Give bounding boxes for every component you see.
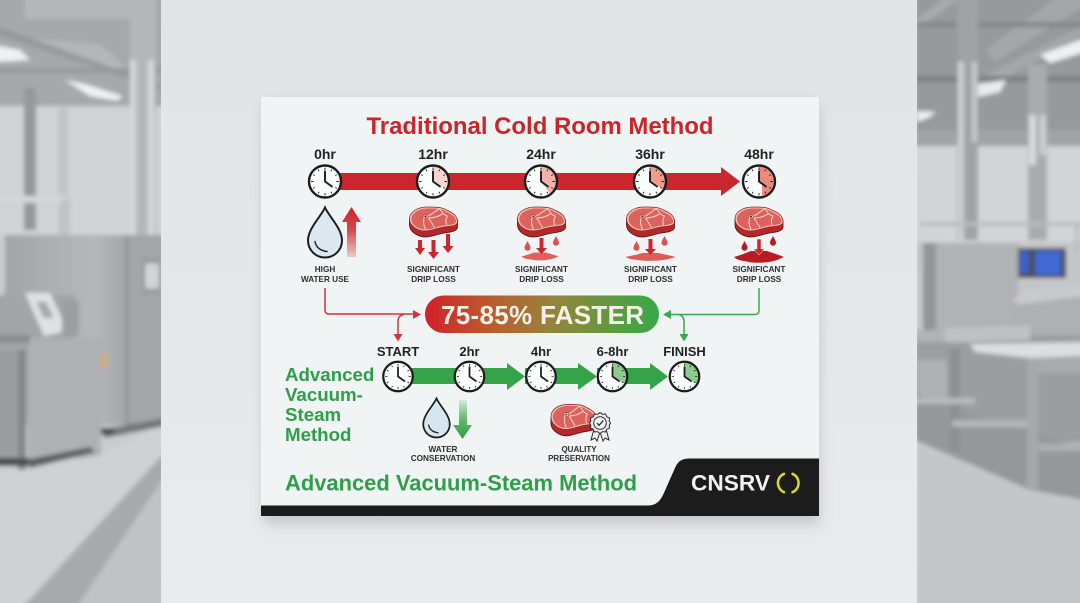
side heading: advanced method: Vacuum-: [285, 384, 363, 405]
icon: red up arrow: [342, 207, 361, 257]
time labels: advanced: 4hr: [531, 344, 551, 359]
callout: 75-85% faster pill: [425, 296, 659, 333]
clock: 48hr: [743, 166, 775, 198]
label: drip loss 24hr: SIGNIFICANT: [515, 264, 568, 274]
time labels: traditional: 0hr: [314, 146, 336, 162]
clock: 24hr: [525, 166, 557, 198]
clock: 12hr: [417, 166, 449, 198]
icon: steak with small puddle: [518, 207, 566, 260]
time labels: traditional: 24hr: [526, 146, 556, 162]
timeline bar: traditional: [335, 167, 740, 196]
icon: water drop, conservation: [423, 398, 450, 438]
time labels: traditional: 12hr: [418, 146, 448, 162]
time labels: traditional: [314, 146, 774, 162]
icon: steak with medium puddle: [626, 207, 676, 261]
poster drop shadow: [264, 104, 819, 524]
time labels: advanced: START: [377, 344, 419, 359]
side heading: advanced method: Steam: [285, 404, 341, 425]
callout: 75-85% faster pill: 75-85% FASTER: [441, 300, 644, 330]
label: quality preservation: QUALITY: [561, 445, 597, 454]
time labels: traditional: 36hr: [635, 146, 665, 162]
clock: 36hr: [634, 166, 666, 198]
poster: [261, 97, 819, 516]
clock: 6-8hr: [598, 362, 627, 391]
icon: steak with three arrows: [410, 207, 458, 259]
wall panel behind the poster: [161, 0, 917, 603]
time labels: advanced: 2hr: [459, 344, 480, 359]
background: blurred factory right side: [915, 0, 1080, 603]
green connector arrows: [663, 288, 759, 342]
logo: CNSRV: CNSRV: [691, 470, 770, 496]
label: drip loss 48hr: SIGNIFICANT: [732, 264, 786, 274]
red connector arrows: [325, 288, 421, 342]
clock: 2hr: [455, 362, 484, 391]
label: drip loss 12hr: DRIP LOSS: [411, 274, 456, 284]
label: high water use: HIGH: [315, 265, 335, 274]
side heading: advanced method: Advanced: [285, 364, 374, 385]
timeline bar: advanced: [405, 363, 668, 390]
side heading: advanced method: Method: [285, 424, 351, 445]
label: high water use: WATER USE: [301, 275, 350, 284]
icon: water drop, high use: [308, 208, 342, 258]
icon: steak with large puddle: [734, 207, 784, 263]
label: drip loss 12hr: SIGNIFICANT: [407, 264, 460, 274]
clock: 4hr: [526, 362, 556, 391]
title: traditional method: Traditional Cold Room Method: [366, 113, 714, 140]
icon: steak with quality badge: [551, 404, 610, 441]
icon: green down arrow: [453, 400, 472, 439]
clock: start: [383, 362, 413, 391]
time labels: advanced: [377, 344, 706, 359]
label: water conservation: CONSERVATION: [411, 454, 475, 463]
time labels: traditional: 48hr: [744, 146, 774, 162]
label: drip loss 24hr: DRIP LOSS: [519, 274, 564, 284]
clock: 0hr: [309, 166, 341, 198]
clock: finish: [670, 362, 699, 391]
label: drip loss 48hr: DRIP LOSS: [737, 274, 782, 284]
label: drip loss 36hr: DRIP LOSS: [628, 274, 673, 284]
label: quality preservation: PRESERVATION: [548, 454, 610, 463]
label: water conservation: WATER: [429, 445, 458, 454]
background: blurred factory left side: [0, 0, 165, 603]
footer: black band and logo corner: [261, 458, 819, 516]
label: drip loss 36hr: SIGNIFICANT: [624, 264, 677, 274]
poster board: [261, 97, 819, 516]
heading: advanced vacuum-steam method: Advanced Vacuum-Steam Method: [285, 470, 637, 496]
time labels: advanced: FINISH: [663, 344, 706, 359]
time labels: advanced: 6-8hr: [597, 344, 628, 359]
